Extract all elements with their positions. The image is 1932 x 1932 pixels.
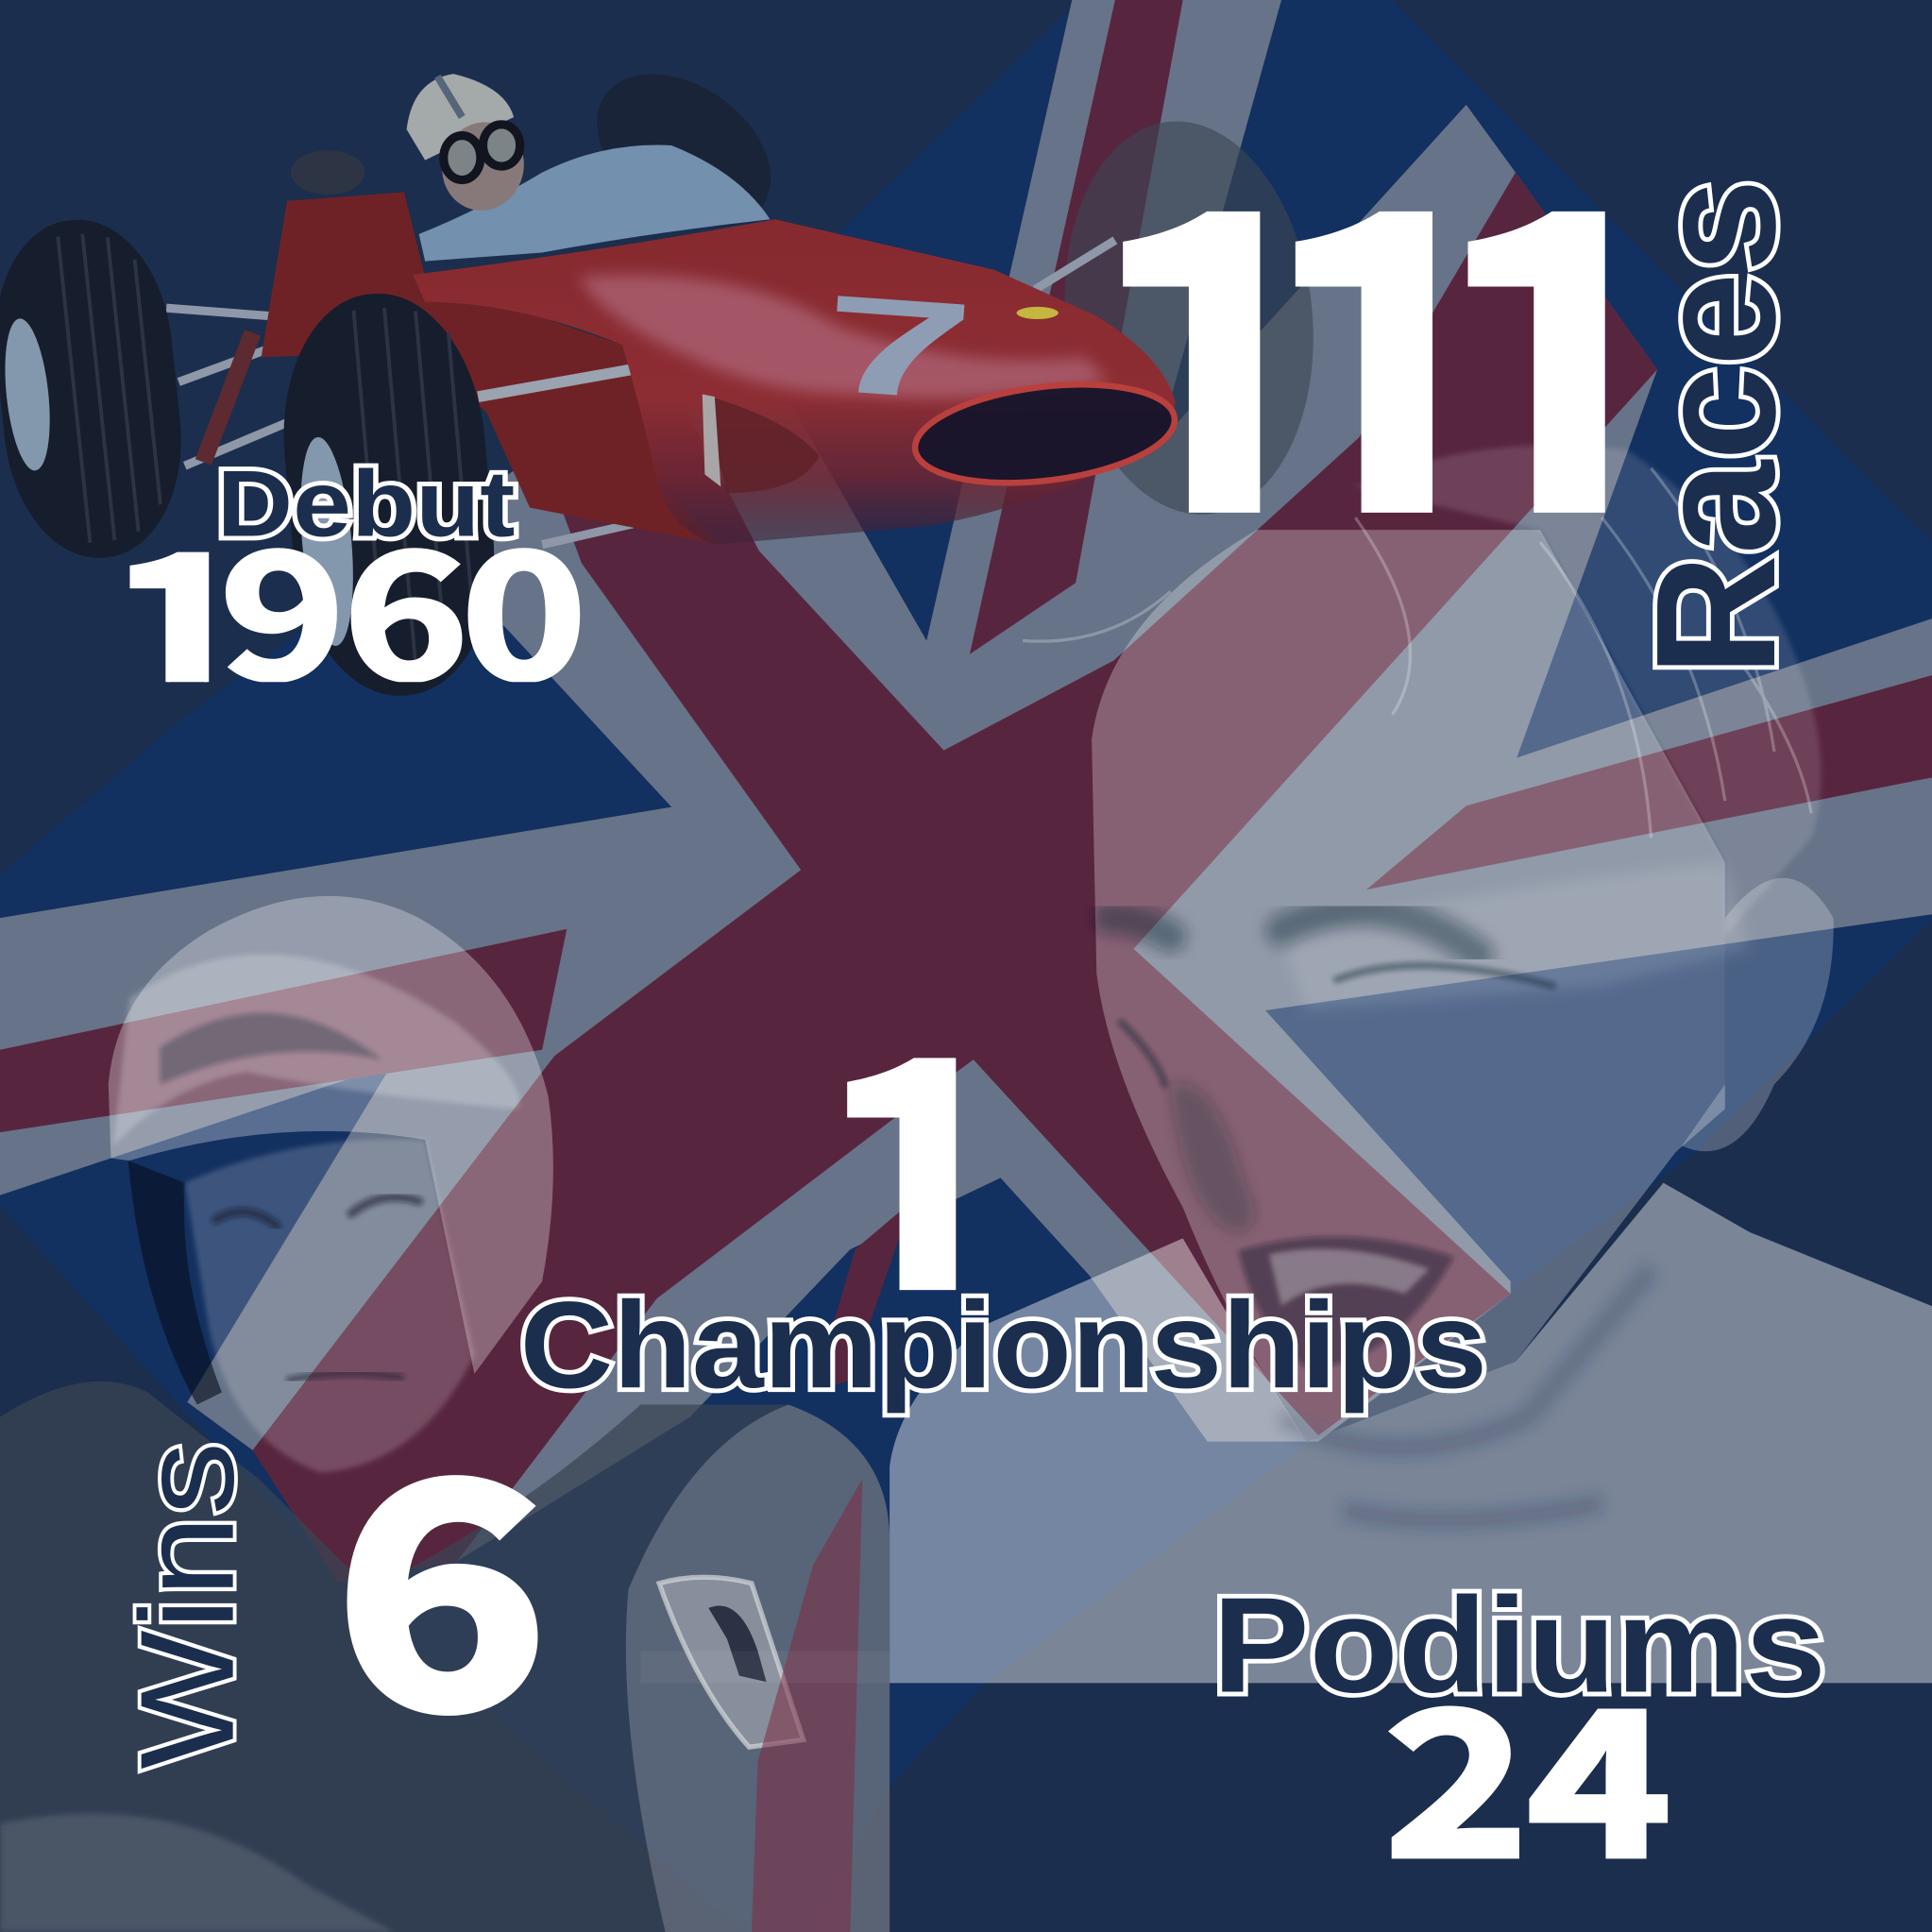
goggles xyxy=(444,125,520,180)
right sleeve lighter xyxy=(626,1405,890,1932)
flag thin red stripe top xyxy=(970,0,1183,654)
far front wheel xyxy=(1046,109,1332,527)
teeth xyxy=(1269,1249,1430,1306)
rear left wheel xyxy=(0,212,194,567)
photo: driver in helmet and sweater xyxy=(0,896,890,1932)
face under helmet xyxy=(185,1139,474,1472)
car number: 7 xyxy=(818,265,978,430)
flag thin red stripe right xyxy=(1366,675,1932,890)
ear xyxy=(1682,878,1834,1151)
prancing horse xyxy=(708,1605,767,1682)
nose intake xyxy=(909,371,1180,496)
rear body xyxy=(262,193,720,545)
hair wisps xyxy=(1023,468,1811,838)
helmet visor edge xyxy=(128,1161,222,1405)
stat: podiums label: Podiums xyxy=(1212,1570,1826,1721)
stat: races label: Races xyxy=(1621,178,1811,676)
side vent xyxy=(703,395,820,493)
seam of lower portrait edge xyxy=(641,1651,890,1683)
photo: portrait of driver smiling xyxy=(890,445,1932,1683)
helmet of driver xyxy=(407,74,514,161)
flag thin red stripe lower xyxy=(813,1201,912,1392)
stat: debut year: 1 xyxy=(104,466,260,772)
driver face xyxy=(432,113,534,220)
eyes xyxy=(215,1197,419,1226)
front left wheel xyxy=(271,285,506,704)
spring xyxy=(203,332,252,462)
stat: wins label: Wins xyxy=(112,1442,262,1770)
stat: races number: 111 xyxy=(1071,8,1703,714)
shirt collar shadow xyxy=(1281,1269,1651,1520)
stat: debut year xyxy=(130,548,580,682)
stat: championships number: 1 xyxy=(805,889,1034,1449)
stat: championships label: Championships xyxy=(520,1276,1487,1414)
nose body xyxy=(413,219,1176,545)
small rear wheel xyxy=(291,150,364,195)
ferrari patch xyxy=(659,1577,804,1747)
chrome pipes xyxy=(478,369,631,397)
flag thin red stripe left xyxy=(0,929,567,1132)
mouth xyxy=(1238,1237,1454,1367)
vertical red band on sleeve xyxy=(752,1479,862,1932)
flag red cross xyxy=(252,173,1657,1582)
forehead highlight band xyxy=(1281,862,1750,1010)
suspension xyxy=(166,240,1115,545)
body highlight xyxy=(579,275,1109,398)
sweater xyxy=(0,1381,890,1932)
bottom arm highlight xyxy=(0,1813,395,1932)
face xyxy=(1092,530,1725,1442)
stat: debut year: 960 xyxy=(219,482,587,729)
brow and eye shadows xyxy=(1109,910,1479,955)
far rear wheel xyxy=(568,42,799,258)
nose and cheek shadow xyxy=(1171,1083,1254,1232)
shirt xyxy=(890,1183,1932,1683)
driver suit and cockpit xyxy=(419,145,771,262)
goggles on helmet xyxy=(113,955,519,1146)
stat: wins number: 6 xyxy=(335,1349,547,1795)
yellow marker xyxy=(1016,307,1059,319)
stat: podiums number: 24 xyxy=(1385,1624,1670,1913)
mouth line xyxy=(290,1373,400,1380)
stat: debut label: Debut xyxy=(217,452,515,557)
photo: red formula one car xyxy=(0,42,1332,704)
hair beyond face xyxy=(1355,445,1822,937)
helmet crown xyxy=(109,896,553,1374)
